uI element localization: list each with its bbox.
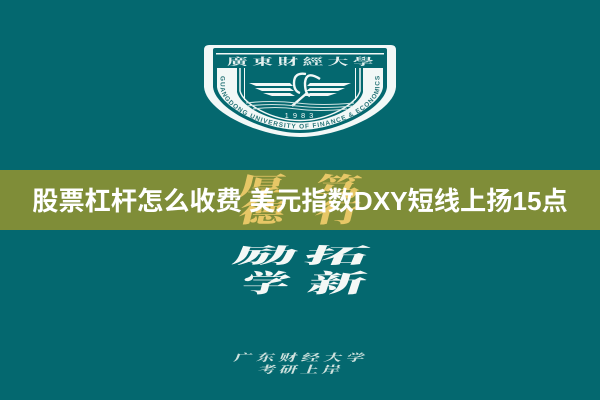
inner shield [237, 68, 363, 122]
logo emblem: GUANGDONG UNIVERSITY OF FINANCE & ECONOMICS [220, 76, 380, 128]
school name: 廣東財經大學 [227, 54, 378, 68]
footer line 1: 广东财经大学 [232, 350, 372, 364]
motto line 2: 新 [304, 263, 373, 299]
circular English name [220, 76, 380, 128]
motto line 1 [228, 239, 375, 269]
monogram [292, 74, 320, 106]
gold calligraphy motto: 行 [311, 192, 366, 230]
background band [0, 170, 600, 230]
motto line 1: 励 [228, 239, 304, 269]
waves [246, 102, 354, 110]
year: 1983 [285, 111, 317, 120]
footer line 2: 考研上岸 [256, 362, 347, 376]
headline: 股票杠杆怎么收费 美元指数DXY短线上扬15点 [32, 186, 568, 216]
logo emblem [204, 45, 396, 137]
wings [249, 83, 351, 96]
gold calligraphy motto [235, 170, 366, 230]
header rule [216, 53, 384, 54]
motto line 1: 拓 [299, 239, 375, 269]
shield teal ring [213, 48, 387, 133]
motto line 2 [238, 263, 373, 299]
motto line 2: 学 [238, 263, 295, 299]
shield outer [204, 45, 396, 137]
gold calligraphy motto: 德 [235, 192, 294, 230]
white lettering band [217, 68, 383, 130]
